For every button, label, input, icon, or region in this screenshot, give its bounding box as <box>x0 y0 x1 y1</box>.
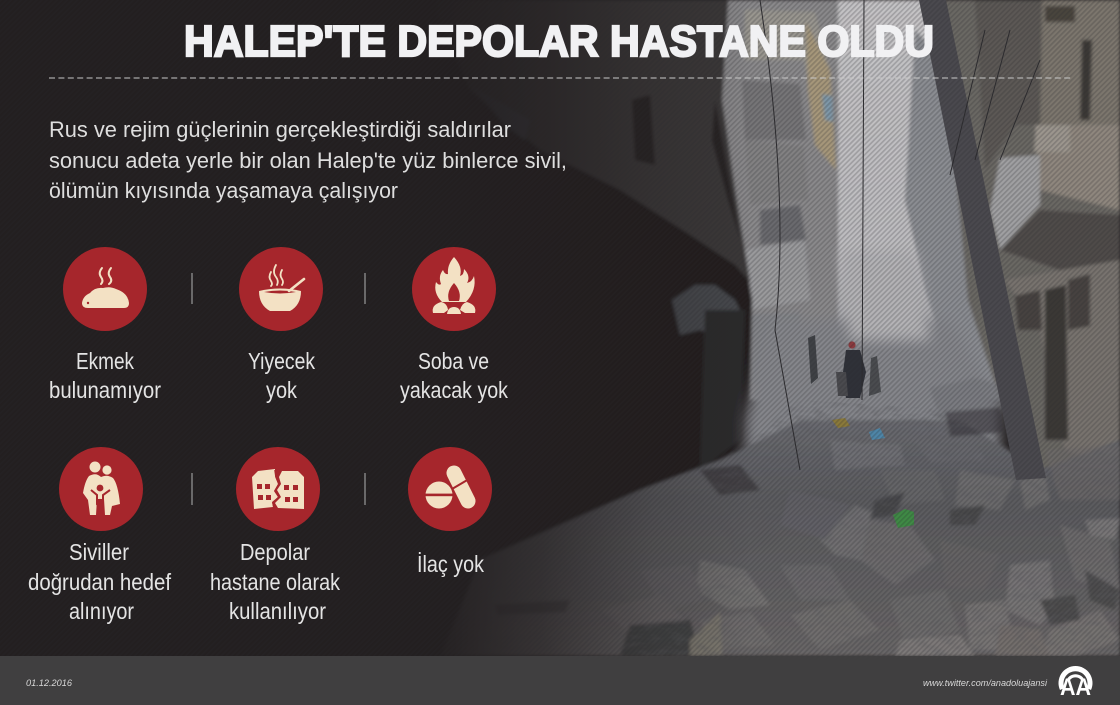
label: İlaç yok <box>417 551 484 577</box>
dashed divider <box>49 77 1071 79</box>
icon: campfire <box>412 247 496 331</box>
label: yakacak yok <box>400 377 508 403</box>
footer bar <box>0 656 1120 705</box>
label: bulunamıyor <box>49 377 161 403</box>
item: warehouses as hospitals <box>210 447 340 624</box>
debris colours <box>832 418 914 528</box>
label: Soba ve <box>418 348 489 374</box>
icon: bread <box>63 247 147 331</box>
icon: soup bowl <box>239 247 323 331</box>
item: civilians <box>28 447 172 624</box>
street haze <box>745 320 1000 470</box>
twitter url: www.twitter.com/anadoluajansi <box>923 678 1048 689</box>
dark building on the left <box>400 0 752 560</box>
label: hastane olarak <box>210 569 340 595</box>
right building mass <box>925 0 1120 480</box>
label: Siviller <box>69 539 129 565</box>
item: food <box>239 247 323 403</box>
intro text: ölümün kıyısında yaşamaya çalışıyor <box>49 178 398 203</box>
label: Yiyecek <box>248 348 315 374</box>
label: Depolar <box>240 539 310 565</box>
label: yok <box>266 377 297 403</box>
label: alınıyor <box>69 598 134 624</box>
title: HALEP'TE DEPOLAR HASTANE OLDU <box>184 17 934 66</box>
label <box>210 539 340 624</box>
intro text: Rus ve rejim güçlerinin gerçekleştirdiği saldırılar <box>49 117 511 142</box>
people in the street <box>808 335 881 398</box>
icon: family <box>59 447 143 531</box>
leaning pole <box>919 0 1046 480</box>
separators <box>192 273 365 505</box>
label <box>400 348 508 403</box>
wires <box>760 0 1040 470</box>
logo: Anadolu Agency: AA <box>1060 674 1091 701</box>
icon: pills <box>408 447 492 531</box>
left fade panel <box>0 0 750 656</box>
intro text <box>49 117 567 203</box>
date: 01.12.2016 <box>26 678 72 688</box>
icon: cracked building <box>236 447 320 531</box>
item: bread <box>49 247 161 403</box>
rubble ground <box>440 420 1120 656</box>
item: no medicine <box>408 447 492 577</box>
rubble texture <box>758 402 940 654</box>
rubble blocks <box>495 378 1120 656</box>
label: kullanılıyor <box>229 598 326 624</box>
label <box>248 348 315 403</box>
label: doğrudan hedef <box>28 569 172 595</box>
background photo: destroyed street <box>470 0 1120 656</box>
label <box>49 348 161 403</box>
label <box>28 539 172 624</box>
item: stove and fuel <box>400 247 508 403</box>
intro text: sonucu adeta yerle bir olan Halep'te yüz binlerce sivil, <box>49 148 567 173</box>
sky and haze <box>780 0 980 420</box>
label: Ekmek <box>76 348 134 374</box>
left mid building <box>715 0 838 400</box>
